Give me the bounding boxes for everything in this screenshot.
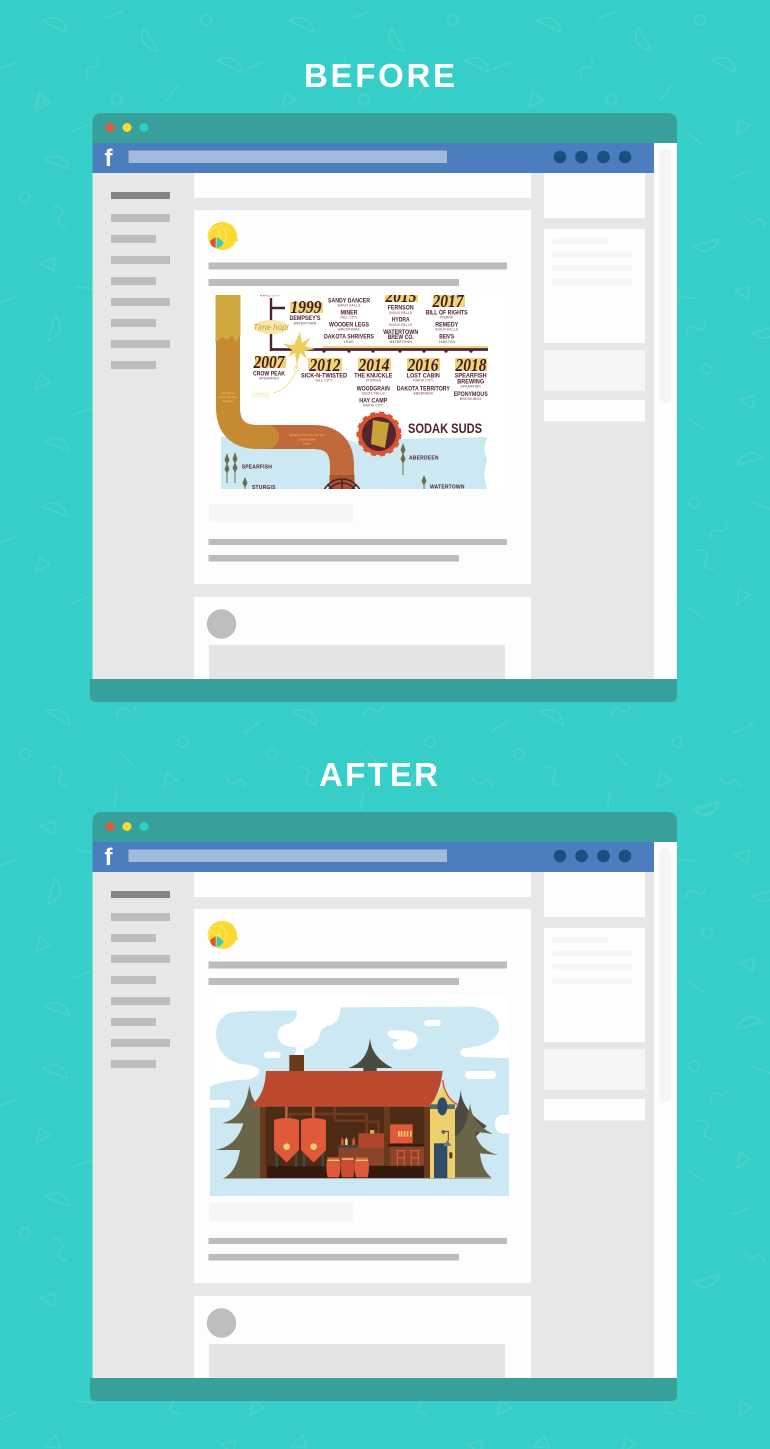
year numbers: 2015 (385, 286, 416, 306)
status box (194, 173, 531, 198)
stools (396, 1151, 420, 1166)
image placeholder (209, 1344, 505, 1378)
year highlights (255, 295, 487, 371)
post image: brewery illustration (210, 997, 509, 1196)
year numbers: 1999 (290, 297, 322, 317)
next post card (194, 1296, 531, 1378)
brewery names: WATERTOWN (389, 340, 413, 344)
icon: starburst (283, 332, 315, 365)
pipe captions: Sends a Thrill You Can The (289, 433, 325, 437)
brewery names: RAPID CITY (260, 294, 281, 298)
brewery names: BREWING (457, 380, 485, 386)
barrels (326, 1157, 369, 1177)
brewery names: PIERRE (440, 316, 453, 320)
left sidebar menu (111, 891, 170, 1068)
search bar (128, 150, 447, 163)
brewery names: SIOUX FALLS (389, 311, 412, 315)
main post card (194, 210, 531, 584)
window control dots (106, 123, 148, 132)
icon: lemon logo (208, 921, 238, 949)
brewery names: WOODGRAIN (357, 386, 390, 392)
pipe captions (219, 391, 325, 446)
brewery names: SICK-N-TWISTED (301, 374, 348, 380)
page background (92, 143, 677, 679)
brewery names: SIOUX FALLS (337, 304, 361, 308)
sky strip (221, 437, 487, 489)
background pine (348, 1037, 393, 1072)
main post card (194, 909, 531, 1283)
year numbers: 2012 (309, 355, 340, 375)
brewery names: BROOKINGS (338, 328, 360, 332)
link title placeholder (209, 1203, 353, 1221)
brewery names: WATERTOWN (383, 330, 418, 336)
brewery names: BREW CO. (388, 335, 414, 341)
icon: facebook f: f (104, 145, 114, 172)
tank legs (275, 1148, 324, 1167)
avatar (207, 609, 236, 639)
map towns and trees: STURGIS (252, 485, 276, 491)
heading: BEFORE: BEFORE (304, 57, 455, 94)
arrow: curved pointer (273, 364, 299, 393)
pipes (290, 1107, 378, 1133)
brewery names: MINER (340, 311, 358, 317)
brewery names: SIOUX FALLS (362, 391, 385, 395)
brewery names: SANDY DANCER (328, 298, 371, 304)
right trees (455, 1090, 498, 1178)
brewery names: HAY CAMP (359, 398, 387, 404)
wall sign (390, 1124, 413, 1143)
brewery names: DAKOTA TERRITORY (397, 386, 450, 392)
link description lines (208, 1238, 507, 1260)
brewery names: STURGIS (366, 379, 381, 383)
brewery names (253, 294, 488, 407)
brewery names: WATERTOWN (294, 322, 317, 326)
map title: SODAK SUDS (408, 421, 482, 436)
timeline (271, 298, 488, 353)
icon: water wheel (324, 478, 360, 489)
brewery names: SPEARFISH (461, 385, 481, 389)
clouds and smoke (210, 1007, 509, 1133)
post image: beer timeline infographic (216, 295, 488, 489)
map towns and trees (224, 443, 465, 491)
brewery names: ABERDEEN (414, 391, 434, 395)
tank pipes (285, 1107, 315, 1119)
nav icons (554, 850, 631, 862)
year numbers: 2007 (253, 352, 285, 372)
brewery names: HILL CITY (341, 316, 358, 320)
left sidebar menu (111, 192, 170, 369)
facebook nav bar (92, 842, 654, 872)
sky (210, 1007, 509, 1196)
browser bottom bar (90, 679, 677, 702)
browser title bar (92, 812, 677, 842)
year numbers (253, 295, 486, 371)
link description lines (208, 539, 507, 562)
panel: before browser window (90, 113, 677, 702)
brewery names: HYDRA (392, 318, 410, 324)
beer pipe (216, 295, 342, 489)
heading: AFTER: AFTER (319, 756, 438, 793)
search bar (128, 850, 447, 862)
brewery names: YANKTON (438, 340, 456, 344)
brewery names: BILL OF RIGHTS (426, 311, 468, 317)
roof (249, 1071, 443, 1107)
right sidebar (544, 173, 645, 422)
brewery names: REMEDY (435, 323, 458, 329)
pipe captions: Scene (303, 442, 311, 446)
brewery names: EPONYMOUS (454, 392, 488, 398)
ground line (223, 1177, 492, 1180)
map towns and trees: ABERDEEN (409, 456, 439, 462)
next post card (194, 597, 531, 679)
pipe captions: Crushed Beer (298, 438, 317, 442)
pipe captions: Hot Wines (221, 391, 235, 395)
icon: beer badge (358, 413, 400, 455)
bar counter (338, 1130, 424, 1166)
brewery building (260, 1107, 430, 1178)
pale year note: (2006) (251, 392, 270, 399)
left tree (215, 1085, 262, 1178)
map towns and trees: WATERTOWN (430, 484, 465, 490)
year numbers: 2014 (358, 355, 390, 375)
brewery names: SIOUX FALLS (389, 323, 412, 327)
brewery names: WOODEN LEGS (329, 323, 369, 329)
browser title bar (92, 113, 677, 143)
page background (92, 842, 677, 1378)
scrollbar (654, 842, 677, 1378)
post text lines (208, 962, 507, 985)
pipe captions: Brewing (223, 399, 234, 403)
brewery names: RAPID CITY (363, 403, 384, 407)
brewery names: SPEARFISH (455, 374, 487, 380)
brewery names: BROOKINGS (460, 397, 481, 401)
scrollbar (654, 143, 677, 679)
time hop label (253, 320, 290, 334)
avatar (207, 1308, 236, 1338)
pipe captions: Hops and Rye (219, 395, 238, 399)
window control dots (106, 822, 148, 831)
brewery names: CROW PEAK (253, 372, 286, 378)
link title placeholder (209, 504, 353, 522)
brewery names: LEAD (344, 340, 354, 344)
brewery names: LOST CABIN (407, 374, 440, 380)
brewery names: FERNSON (388, 306, 414, 312)
chimney (289, 1055, 304, 1072)
year numbers: 2018 (455, 355, 486, 375)
brewery names: SPEARFISH (259, 377, 280, 381)
time hop label: Time hop! (253, 323, 290, 332)
nav icons (554, 151, 631, 163)
status box (194, 872, 531, 897)
panel: after browser window (90, 812, 677, 1401)
facebook nav bar (92, 143, 654, 173)
yellow tower (430, 1080, 458, 1178)
year numbers: 2017 (432, 291, 464, 311)
brewery names: SIOUX FALLS (435, 328, 458, 332)
browser bottom bar (90, 1378, 677, 1401)
brewery names: HILL CITY (316, 379, 333, 383)
brewery names: THE KNUCKLE (354, 374, 392, 380)
image placeholder (209, 645, 505, 679)
brewery names: DEMPSEY'S (290, 316, 320, 322)
brewery names: DAKOTA SHRIVERS (324, 335, 374, 341)
right sidebar (544, 872, 645, 1120)
map towns and trees: SPEARFISH (242, 464, 272, 470)
year numbers: 2016 (407, 355, 438, 375)
brewery names: RAPID CITY (413, 379, 434, 383)
brewing tanks (274, 1118, 326, 1163)
post text lines (208, 262, 507, 286)
icon: facebook f: f (104, 844, 114, 871)
icon: lemon logo (208, 222, 238, 250)
brewery names: BEN'S (439, 335, 454, 341)
